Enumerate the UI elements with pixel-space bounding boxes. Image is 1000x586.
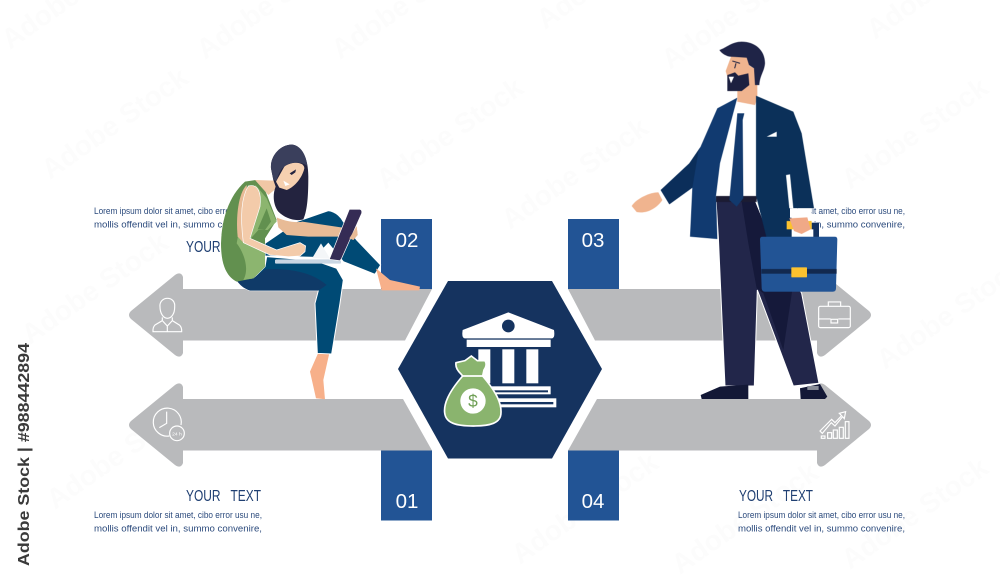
text block: bottom left [94,488,262,534]
text block: top left [94,206,262,256]
neck [255,180,280,195]
laptop [275,209,362,264]
near arm [242,186,306,257]
icon: bank with money bag [445,312,556,426]
beard [727,72,749,91]
central hexagon [398,281,602,458]
number box 03: 03 [582,229,604,252]
eye [732,61,740,68]
far arm [277,217,358,240]
arm shade [237,185,250,243]
text block: bottom right: mollis offendit vel in, summo convenire, [738,524,905,534]
smile and eye [283,169,296,186]
right cuff [790,208,812,218]
hair [271,145,308,220]
face [276,163,304,190]
number box 04 [568,450,619,520]
text block: top right: Lorem ipsum dolor sit amet, cibo error usu ne, [738,206,905,217]
number box 03 [568,219,619,289]
text block: bottom right [738,488,905,534]
text block: top right: mollis offendit vel in, summo convenire, [738,220,905,230]
shirt front [237,185,277,280]
sleeve lining [786,174,793,208]
number box 01: 01 [396,490,418,513]
pants shade [237,269,327,291]
pocket square [767,132,777,137]
icon: growth chart [820,412,849,438]
foot on arrow [376,268,420,290]
number box 02: 02 [396,229,418,252]
text block: bottom left: YOUR TEXT [186,488,261,505]
text block: top right [738,206,905,256]
bank steps [490,386,556,407]
number box 01 [381,450,432,520]
jacket left [661,98,737,239]
foot hanging [310,353,329,399]
left hand [632,192,662,212]
text block: top left: YOUR TEXT [186,239,261,256]
icon: 24h clock [153,408,184,441]
number box 02 [381,219,432,289]
text block: bottom right: Lorem ipsum dolor sit amet, cibo error usu ne, [738,510,905,521]
belt [716,196,757,202]
arrow 04: lower right [568,383,871,467]
text block: top left: Lorem ipsum dolor sit amet, cibo error usu ne, [94,206,262,217]
icon: person [153,298,182,332]
shirt back [221,180,277,282]
raised leg [265,211,381,274]
money bag: $ [468,391,478,411]
hand on tablet [349,227,358,240]
tie [729,113,744,207]
arrow 02: upper left [129,273,432,357]
icon: briefcase [819,302,850,328]
figure: woman with laptop [221,145,420,399]
shirt chest shade [258,208,271,230]
text block: top left: mollis offendit vel in, summo convenire, [94,220,262,230]
paper sheet [312,243,330,259]
text block: top right: YOUR TEXT [739,239,814,256]
text block: bottom left: Lorem ipsum dolor sit amet, cibo error usu ne, [94,510,262,521]
arrow 03: upper right [568,273,871,357]
shirt [716,100,756,196]
hair [719,42,765,85]
text block: bottom left: mollis offendit vel in, summo convenire, [94,524,262,534]
arrow 01: lower left [129,383,432,467]
bank columns [467,340,551,383]
neck and face [726,57,757,105]
trousers [716,200,819,386]
hair top [271,145,307,181]
icon: 24h clock: 24 h [172,431,182,437]
figure: businessman [632,42,837,399]
sleeve shade [661,108,717,204]
jacket right [756,96,814,239]
upper body [632,42,814,239]
lower pants [237,257,343,354]
side stock id text: Adobe Stock | #988442894 [16,343,33,566]
number box 04: 04 [582,490,604,513]
text block: bottom right: YOUR TEXT [739,488,813,505]
shoes [701,384,827,399]
left cuff [659,190,670,205]
bank roof [462,312,554,338]
briefcase [760,217,837,292]
